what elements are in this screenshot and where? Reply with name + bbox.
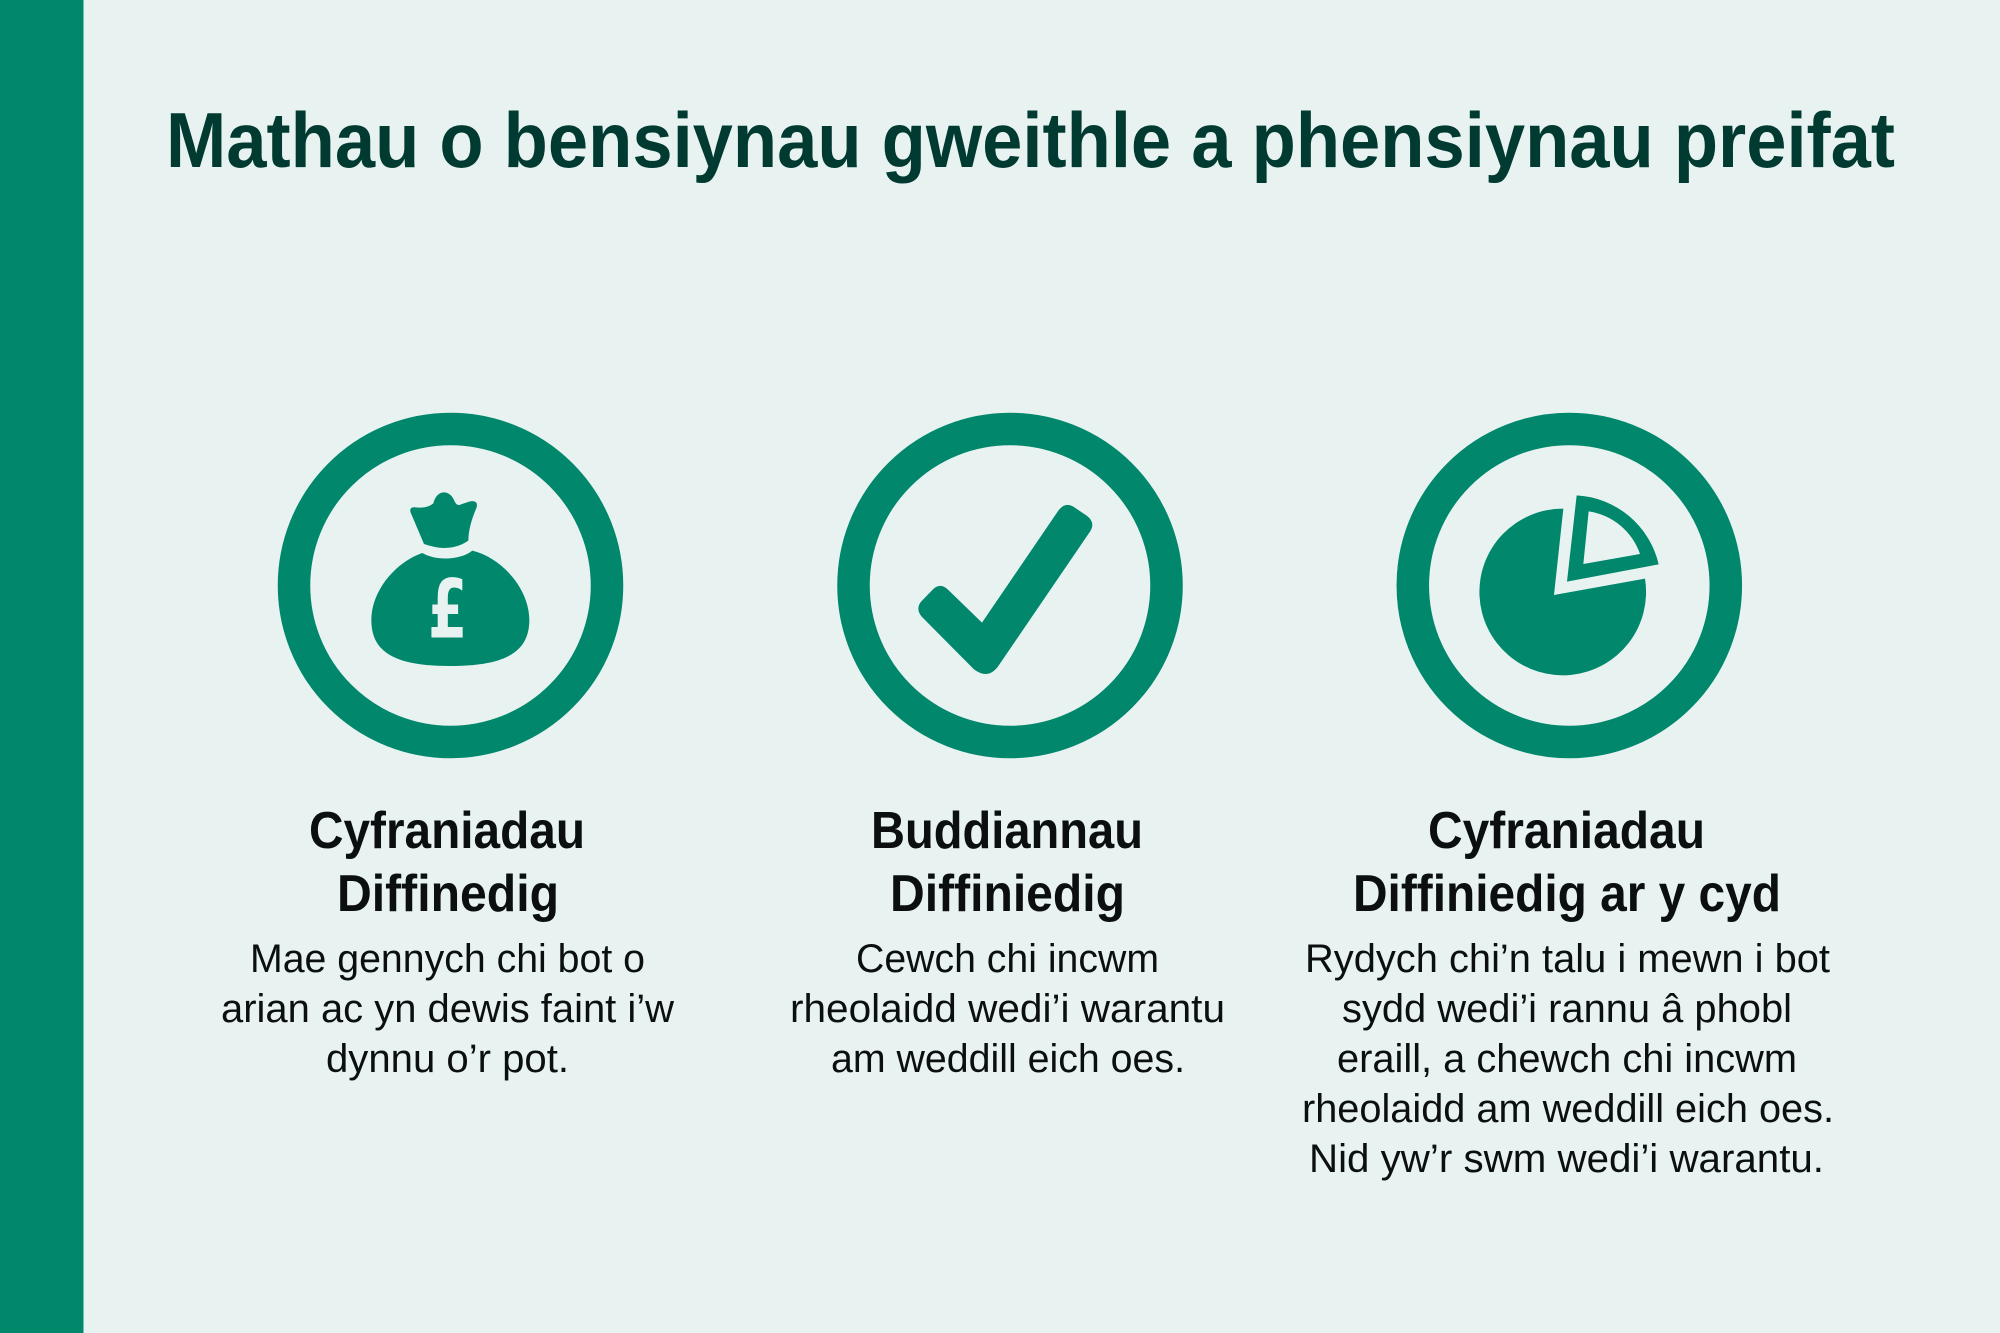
text: description: dynnu o’r pot. [326, 1037, 569, 1081]
text: description [221, 937, 674, 1081]
panel: Cyfraniadau Diffinedig [221, 429, 674, 1081]
panel: Cyfraniadau Diffiniedig ar y cyd [1302, 429, 1834, 1181]
heading: Cyfraniadau Diffiniedig ar y cyd: Diffiniedig ar y cyd [1353, 865, 1781, 923]
icon: money bag in circle: £ [428, 563, 467, 657]
icon: money bag in circle [294, 429, 607, 742]
title: Mathau o bensiynau gweithle a phensiynau preifat [166, 96, 1895, 184]
text: description: rheolaidd wedi’i warantu [790, 987, 1225, 1031]
text: description: Cewch chi incwm [856, 937, 1159, 981]
text: description: sydd wedi’i rannu â phobl [1342, 987, 1792, 1031]
text: description: eraill, a chewch chi incwm [1337, 1037, 1797, 1081]
heading: Cyfraniadau Diffinedig [309, 802, 585, 923]
icon: check mark in circle [854, 429, 1166, 742]
green side bar [0, 0, 84, 1333]
heading: Buddiannau Diffiniedig [871, 802, 1143, 923]
heading: Cyfraniadau Diffiniedig ar y cyd [1353, 802, 1781, 923]
heading: Buddiannau Diffiniedig: Diffiniedig [890, 865, 1125, 923]
icon: pie chart in circle [1413, 429, 1726, 742]
heading: Cyfraniadau Diffinedig: Diffinedig [337, 865, 559, 923]
panel: Buddiannau Diffiniedig [790, 429, 1225, 1081]
text: description [790, 937, 1225, 1081]
text: description: arian ac yn dewis faint i’w [221, 987, 674, 1031]
heading: Buddiannau Diffiniedig: Buddiannau [871, 802, 1143, 860]
text: description: Rydych chi’n talu i mewn i bot [1305, 937, 1830, 981]
text: description [1302, 937, 1834, 1181]
text: description: rheolaidd am weddill eich oes. [1302, 1087, 1834, 1131]
text: description: Mae gennych chi bot o [250, 937, 645, 981]
heading: Cyfraniadau Diffiniedig ar y cyd: Cyfraniadau [1428, 802, 1705, 860]
heading: Cyfraniadau Diffinedig: Cyfraniadau [309, 802, 585, 860]
text: description: am weddill eich oes. [831, 1037, 1185, 1081]
text: description: Nid yw’r swm wedi’i warantu. [1309, 1137, 1824, 1181]
